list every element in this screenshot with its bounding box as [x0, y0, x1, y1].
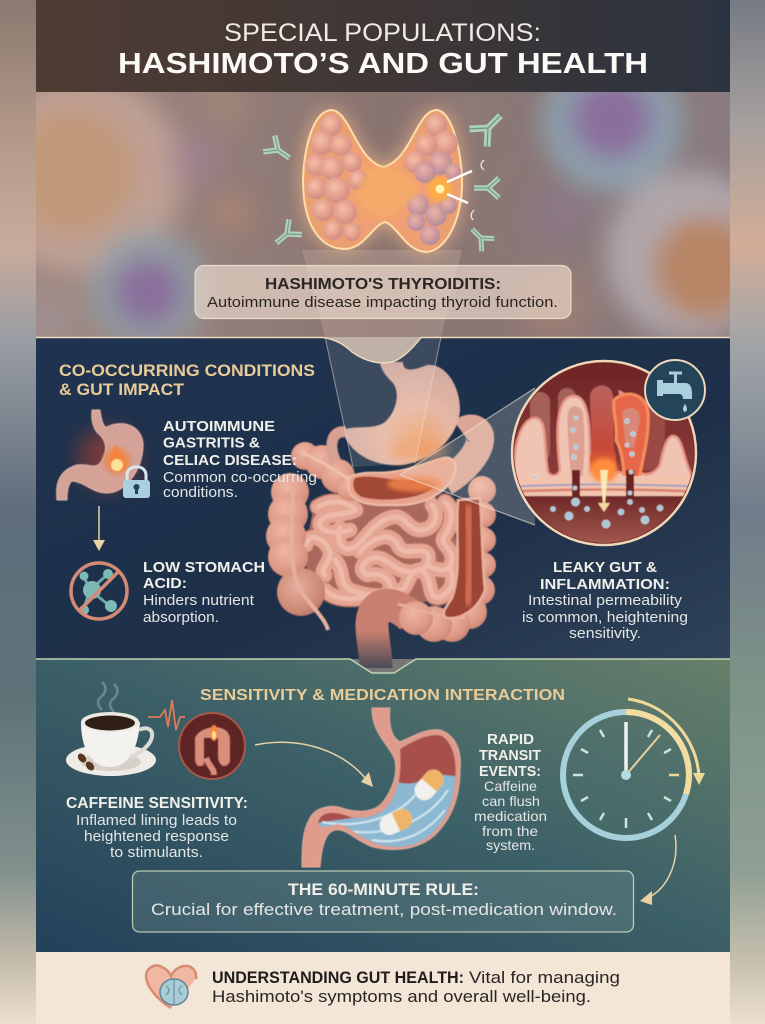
icon: inflamed gut circle [179, 713, 245, 779]
text: leaky gut and inflammation: is common, heightening [522, 610, 688, 626]
text: leaky gut and inflammation: Intestinal permeability [528, 593, 683, 609]
arrow: clock to rule [640, 835, 676, 905]
arrow: to stomach [255, 742, 373, 787]
text: rapid transit events: RAPID [487, 732, 534, 748]
stomach [342, 362, 460, 465]
text: autoimmune gastritis and celiac disease: CELIAC DISEASE: [163, 452, 297, 469]
callout: Hashimoto's thyroiditis: Autoimmune disease impacting thyroid function. [207, 294, 558, 311]
text: rapid transit events: EVENTS: [479, 764, 541, 780]
transverse colon [291, 442, 456, 630]
text: low stomach acid: LOW STOMACH [143, 559, 265, 576]
text: caffeine sensitivity: CAFFEINE SENSITIVITY: [66, 795, 248, 812]
callout: Hashimoto's thyroiditis [195, 266, 571, 318]
icon: clock [563, 699, 705, 838]
callout: the 60-minute rule: Crucial for effective treatment, post-medication window. [151, 900, 617, 919]
text: leaky gut and inflammation: sensitivity. [569, 626, 641, 642]
text: autoimmune gastritis and celiac disease: AUTOIMMUNE [163, 418, 275, 435]
text: rapid transit events [474, 732, 547, 853]
icon: inflamed stomach with lock [57, 410, 150, 500]
text: caffeine sensitivity [66, 795, 248, 861]
title: SPECIAL POPULATIONS: [224, 19, 541, 47]
heading: sensitivity and medication interaction: SENSITIVITY & MEDICATION INTERACTION [200, 687, 565, 704]
text: autoimmune gastritis and celiac disease [163, 418, 317, 501]
text: low stomach acid [143, 559, 265, 626]
text: leaky gut and inflammation: LEAKY GUT & [553, 559, 657, 576]
icon: antibodies [263, 107, 509, 251]
descending colon bumps [453, 476, 496, 629]
small intestine [304, 495, 460, 602]
header band [36, 0, 730, 92]
magnifier beam [400, 388, 535, 525]
text: rapid transit events: system. [486, 837, 535, 853]
text: understanding gut health [212, 969, 620, 1006]
heading: co-occurring conditions: & GUT IMPACT [59, 380, 185, 399]
text: understanding gut health: Vital for managing [469, 969, 620, 987]
panel: co-occurring conditions [36, 337, 730, 668]
icon: stomach with capsules [302, 708, 470, 867]
icon: leaking faucet [645, 360, 705, 420]
panel: thyroid section [36, 92, 730, 337]
text: rapid transit events: can flush [482, 793, 540, 809]
icon: coffee cup [66, 682, 156, 776]
text: caffeine sensitivity: Inflamed lining leads to [76, 813, 237, 829]
callout: Hashimoto's thyroiditis: HASHIMOTO'S THYROIDITIS: [265, 276, 501, 293]
callout: magnified intestinal wall [505, 360, 705, 548]
text: caffeine sensitivity: to stimulants. [110, 845, 203, 861]
callout: the 60-minute rule: THE 60-MINUTE RULE: [288, 880, 479, 899]
icon: blocked nutrient [71, 563, 127, 619]
title [118, 19, 648, 80]
text: rapid transit events: from the [482, 823, 538, 839]
light beam from thyroid [302, 250, 462, 337]
text: autoimmune gastritis and celiac disease: GASTRITIS & [163, 434, 260, 452]
callout: the 60-minute rule [132, 871, 634, 932]
text: understanding gut health: Hashimoto's symptoms and overall well-being. [212, 988, 591, 1006]
text: autoimmune gastritis and celiac disease: conditions. [163, 485, 238, 501]
ascending colon and cecum [266, 473, 325, 616]
text: rapid transit events: Caffeine [484, 778, 537, 794]
icon: thyroid gland [303, 110, 484, 252]
text: rapid transit events: medication [474, 808, 547, 824]
text: leaky gut and inflammation [522, 559, 688, 642]
text: rapid transit events: TRANSIT [479, 748, 541, 764]
text: understanding gut health: UNDERSTANDING GUT HEALTH: [212, 969, 464, 987]
heading: co-occurring conditions [59, 361, 315, 399]
illustration: digestive tract [266, 362, 496, 668]
blurred cell background [36, 92, 730, 337]
text: low stomach acid: absorption. [143, 610, 219, 626]
text: autoimmune gastritis and celiac disease: Common co-occurring [163, 470, 317, 486]
duodenum [332, 432, 345, 462]
title: HASHIMOTO’S AND GUT HEALTH [118, 48, 648, 80]
text: caffeine sensitivity: heightened response [84, 829, 229, 845]
sigmoid colon [372, 601, 470, 668]
text: leaky gut and inflammation: INFLAMMATION: [540, 576, 670, 593]
right colon flexure [445, 429, 480, 482]
text: low stomach acid: Hinders nutrient [143, 593, 254, 609]
light beam to stomach [325, 337, 441, 467]
icon: heartbeat [148, 700, 185, 730]
text: low stomach acid: ACID: [143, 575, 187, 592]
arrow: gastritis to low acid [93, 506, 105, 551]
icon: heart and brain [146, 965, 196, 1008]
heading: co-occurring conditions: CO-OCCURRING CONDITIONS [59, 361, 315, 380]
descending colon inflamed strip [444, 498, 485, 618]
panel: sensitivity and medication [36, 659, 730, 952]
footer band [36, 952, 730, 1024]
